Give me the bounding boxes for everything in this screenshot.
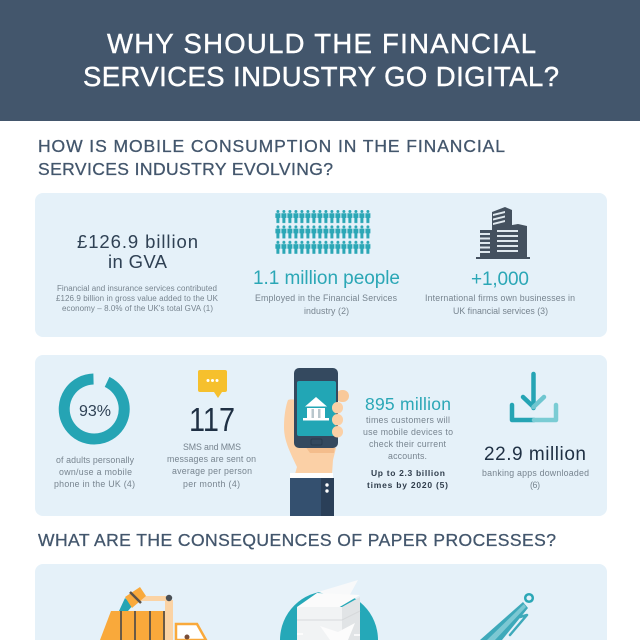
stat: GVA: £126.9 billion — [77, 231, 198, 252]
stat: 117 messages: per month (4) — [183, 479, 240, 489]
stat: international firms — [425, 269, 575, 316]
panel: mobile stats — [35, 355, 607, 516]
illustration: digger with waste — [100, 587, 206, 640]
stat: international firms: UK financial services (3) — [453, 306, 548, 316]
stat: employed people: industry (2) — [304, 306, 349, 316]
stat: employed people: Employed in the Financial Services — [255, 293, 398, 303]
icon: download — [512, 374, 556, 420]
panel: paper consequences — [35, 564, 607, 640]
stat: 117 messages: average per person — [172, 466, 252, 476]
heading: mobile consumption — [38, 136, 505, 179]
stat: 895 million: times customers will — [366, 415, 450, 425]
stat: employed people: 1.1 million people — [253, 268, 400, 289]
icon: bank — [303, 397, 329, 420]
stat: employed people — [253, 268, 400, 316]
stat: 117 messages: SMS and MMS — [183, 442, 241, 452]
stat: 117 messages: messages are sent on — [167, 454, 256, 464]
stat: 895 million: 895 million — [365, 394, 451, 414]
stat: GVA: £126.9 billion in gross value added to the UK — [56, 294, 219, 303]
stat: 895 million: use mobile devices to — [363, 427, 453, 437]
icon: speech bubble — [198, 370, 227, 398]
stat: GVA — [56, 231, 219, 313]
stat: GVA: economy – 8.0% of the UK's total GVA (1) — [62, 304, 213, 313]
stat: international firms: International firms own businesses in — [425, 293, 575, 303]
text: adults phone ownership: own/use a mobile — [59, 467, 132, 477]
stat: 895 million: accounts. — [388, 451, 427, 461]
text: adults phone ownership: phone in the UK (4) — [54, 479, 135, 489]
icon: office buildings — [476, 207, 530, 259]
illustration: hand holding phone — [284, 368, 349, 516]
text: adults phone ownership: of adults personally — [56, 455, 135, 465]
heading: mobile consumption: SERVICES INDUSTRY EVOLVING? — [38, 159, 333, 179]
stat: banking apps — [482, 444, 589, 490]
title — [83, 28, 559, 92]
illustration: paper stack — [280, 580, 378, 640]
stat: banking apps: banking apps downloaded — [482, 468, 589, 478]
title: SERVICES INDUSTRY GO DIGITAL? — [83, 61, 559, 92]
stat: banking apps: 22.9 million — [484, 444, 586, 465]
chart: 93% donut — [64, 379, 124, 439]
heading: mobile consumption: HOW IS MOBILE CONSUMPTION IN THE FINANCIAL — [38, 136, 505, 156]
header banner — [0, 0, 640, 121]
stat: international firms: +1,000 — [471, 269, 529, 290]
stat: GVA: Financial and insurance services contributed — [57, 284, 217, 293]
chart: 93% donut: 93% — [79, 403, 111, 420]
stat: 895 million: Up to 2.3 billion — [371, 468, 445, 478]
stat: 117 messages — [167, 401, 256, 489]
icon: rows of people — [275, 210, 371, 254]
heading: paper processes: WHAT ARE THE CONSEQUENCES OF PAPER PROCESSES? — [38, 530, 556, 550]
text: adults phone ownership — [54, 455, 135, 489]
illustration: pen — [480, 594, 533, 640]
stat: 895 million: times by 2020 (5) — [367, 480, 448, 490]
stat: 895 million: check their current — [369, 439, 447, 449]
stat: 117 messages: 117 — [189, 401, 235, 438]
title: WHY SHOULD THE FINANCIAL — [107, 28, 536, 59]
stat: banking apps: (6) — [530, 480, 540, 490]
stat: GVA: in GVA — [108, 251, 168, 272]
stat: 895 million — [363, 394, 453, 490]
panel: industry stats — [35, 193, 607, 337]
